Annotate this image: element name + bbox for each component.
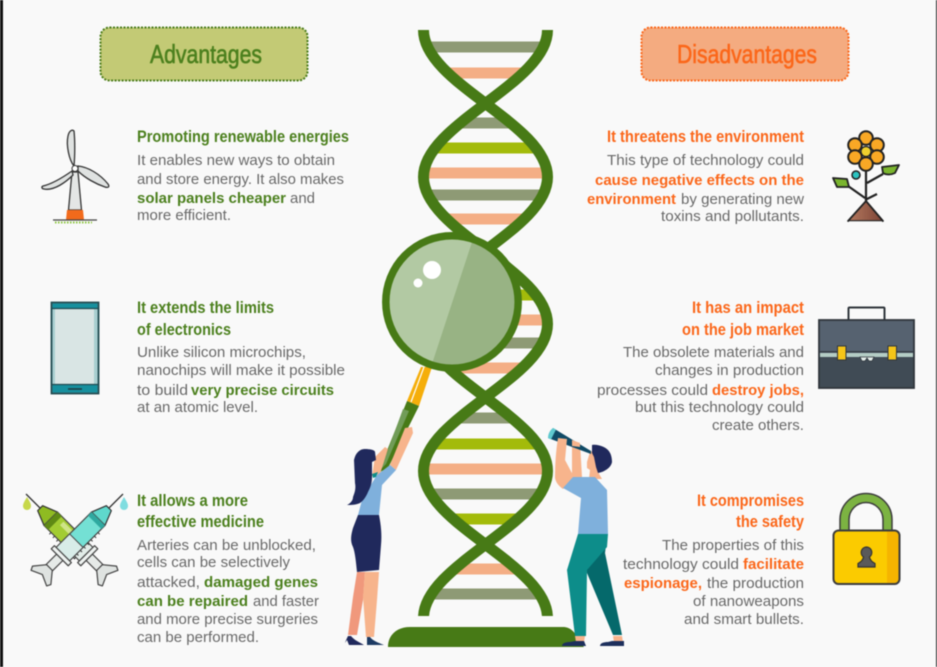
text block: threatens the environment: This type of technology could [607, 153, 804, 169]
pedestal [388, 627, 584, 647]
text block: extends the limits of electronics: nanochips will make it possible [137, 363, 345, 379]
text block: more effective medicine: effective medicine [137, 512, 264, 531]
text block: compromises the safety: The properties of this [662, 538, 804, 554]
drop: cyan [120, 497, 128, 510]
magnifier lens [386, 236, 530, 370]
text block: promoting renewable energies: solar panels cheaper [137, 191, 286, 207]
DNA rungs [423, 42, 547, 600]
illustration: woman holding magnifier [345, 427, 413, 645]
text block: extends the limits of electronics: to build [137, 383, 188, 399]
icon: padlock [834, 498, 900, 584]
text block: impact on the job market: create others. [712, 418, 804, 434]
text block: extends the limits of electronics: at an atomic level. [137, 400, 258, 416]
text block: more effective medicine: cells can be selectively [137, 555, 291, 571]
illustration: man with telescope [548, 428, 624, 646]
heading: Advantages [100, 28, 308, 80]
text block: compromises the safety [623, 491, 804, 628]
text block: threatens the environment: It threatens the environment [607, 127, 804, 146]
text block: more effective medicine: can be performed. [137, 630, 259, 646]
illustration: DNA double helix [388, 30, 584, 647]
text block: impact on the job market: destroy jobs, [712, 383, 804, 399]
text block: promoting renewable energies [137, 127, 349, 224]
text block: extends the limits of electronics [137, 298, 345, 416]
icon: crossed syringes [17, 485, 132, 587]
text block: promoting renewable energies: and store energy. It also makes [137, 172, 344, 188]
text block: promoting renewable energies: and [290, 191, 315, 207]
DNA strands [424, 30, 548, 618]
icon: smartphone [51, 302, 99, 394]
text block: compromises the safety: technology could [623, 557, 739, 573]
text block: impact on the job market: but this technology could [635, 400, 804, 416]
text block: promoting renewable energies: more efficient. [137, 208, 231, 224]
text block: threatens the environment: by generating new [681, 192, 805, 208]
text block: compromises the safety: the safety [736, 512, 804, 531]
text block: compromises the safety: espionage, [624, 576, 702, 592]
text block: threatens the environment: toxins and pollutants. [661, 209, 804, 225]
heading: Disadvantages: Disadvantages [677, 39, 817, 69]
text block: promoting renewable energies: Promoting renewable energies [137, 127, 349, 146]
heading: Disadvantages [642, 28, 848, 80]
text block: threatens the environment: cause negative effects on the [595, 173, 804, 189]
icon: briefcase [819, 308, 914, 388]
text block: more effective medicine: damaged genes [204, 575, 318, 591]
text block: more effective medicine: Arteries can be unblocked, [137, 538, 316, 554]
drop: green [23, 497, 31, 510]
text block: compromises the safety: facilitate [743, 557, 804, 573]
text block: more effective medicine [137, 491, 319, 646]
syringe: cyan [30, 485, 132, 587]
icon: flower on soil mound [833, 131, 899, 222]
text block: extends the limits of electronics: very precise circuits [191, 383, 334, 399]
text block: impact on the job market: changes in production [655, 363, 804, 379]
text block: more effective medicine: can be repaired [137, 594, 248, 610]
text block: more effective medicine: and more precise surgeries [137, 612, 318, 628]
text block: threatens the environment: environment [587, 192, 676, 208]
text block: compromises the safety: It compromises [697, 491, 804, 510]
text block: impact on the job market: The obsolete materials and [623, 345, 804, 361]
text block: compromises the safety: the production [707, 576, 804, 592]
text block: compromises the safety: and smart bullets. [684, 612, 804, 628]
text block: impact on the job market [597, 298, 804, 434]
text block: threatens the environment [587, 127, 805, 225]
magnifier handle [378, 367, 432, 473]
text block: more effective medicine: and faster [253, 594, 319, 610]
text block: impact on the job market: processes could [597, 383, 708, 399]
text block: more effective medicine: It allows a more [137, 491, 248, 510]
text block: compromises the safety: of nanoweapons [693, 594, 804, 610]
text block: extends the limits of electronics: Unlike silicon microchips, [137, 345, 306, 361]
text block: impact on the job market: on the job market [682, 320, 804, 339]
icon: wind turbine [42, 130, 109, 222]
text block: extends the limits of electronics: of electronics [137, 320, 231, 339]
text block: more effective medicine: attacked, [137, 575, 200, 591]
text block: promoting renewable energies: It enables new ways to obtain [137, 153, 335, 169]
syringe: green [17, 485, 119, 587]
heading: Advantages: Advantages [150, 39, 262, 69]
text block: impact on the job market: It has an impact [692, 298, 804, 317]
illustration: magnifying glass [378, 236, 530, 473]
text block: extends the limits of electronics: It extends the limits [137, 298, 274, 317]
